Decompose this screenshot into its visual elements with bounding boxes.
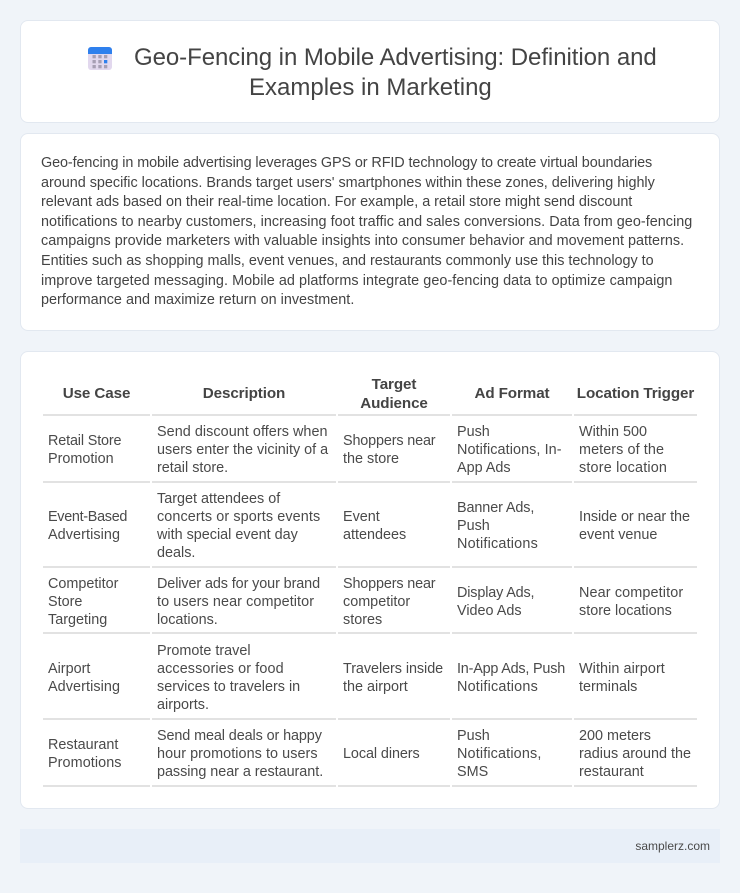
table: use cases: stores xyxy=(343,612,382,628)
row: Restaurant Promotions xyxy=(48,737,122,771)
table: use cases: users enter the vicinity of a xyxy=(157,442,328,458)
panel: table card xyxy=(20,351,720,809)
table: use cases: retail store. xyxy=(157,460,228,476)
header: Target Audience xyxy=(360,376,428,412)
intro text block: Geo-fencing in mobile advertising leverages GPS or RFID technology to create virtual boundaries xyxy=(41,155,652,171)
row: Competitor Store Targeting: Competitor xyxy=(48,576,118,592)
table: use cases xyxy=(43,376,697,787)
table: use cases: Shoppers near xyxy=(343,433,435,449)
table: use cases: Within airport xyxy=(579,661,665,677)
header: Use Case: Use Case xyxy=(63,385,130,402)
icon: calendar xyxy=(88,47,112,70)
table: use cases: event venue xyxy=(579,527,657,543)
table: use cases: hour promotions to users xyxy=(157,746,318,762)
table: use cases: App Ads xyxy=(457,460,511,476)
table: use cases: Display Ads, xyxy=(457,585,534,601)
table: use cases: to users near competitor xyxy=(157,594,314,610)
table: use cases: services to travelers in xyxy=(157,679,300,695)
row: Restaurant Promotions: Restaurant xyxy=(48,737,118,753)
table: use cases: store location xyxy=(579,460,667,476)
table: use cases: Near competitor xyxy=(579,585,683,601)
row: Airport Advertising xyxy=(48,661,120,695)
table: use cases: Deliver ads for your brand xyxy=(157,576,320,592)
intro text block: improve targeted messaging. Mobile ad platforms integrate geo-fencing data to optimize campaign xyxy=(41,273,672,289)
intro text block: relevant ads based on their real-time location. For example, a retail store might send discount xyxy=(41,194,632,210)
panel: title card xyxy=(20,20,720,123)
header: Target Audience: Target xyxy=(372,376,416,393)
table: use cases: restaurant xyxy=(579,764,644,780)
row: Competitor Store Targeting xyxy=(48,576,118,628)
row: Airport Advertising: Advertising xyxy=(48,679,120,695)
header: Target Audience: Audience xyxy=(360,395,428,412)
table: use cases: attendees xyxy=(343,527,406,543)
row: Restaurant Promotions: Promotions xyxy=(48,755,122,771)
table: use cases: Promote travel xyxy=(157,643,251,659)
table: use cases: 200 meters xyxy=(579,728,651,744)
header: Description: Description xyxy=(203,385,285,402)
table: use cases: Target attendees of xyxy=(157,491,280,507)
table: use cases: concerts or sports events xyxy=(157,509,320,525)
table: use cases: meters of the xyxy=(579,442,664,458)
intro text block: campaigns provide marketers with valuable insights into consumer behavior and movement patterns. xyxy=(41,233,684,249)
panel: intro card xyxy=(20,133,720,331)
table: use cases: Video Ads xyxy=(457,603,522,619)
table: use cases: with special event day xyxy=(157,527,298,543)
table: use cases: Event xyxy=(343,509,380,525)
title: Examples in Marketing xyxy=(249,74,492,101)
table: use cases: Notifications xyxy=(457,679,538,695)
table: use cases: Within 500 xyxy=(579,424,647,440)
intro text block xyxy=(41,155,692,308)
table: use cases: store locations xyxy=(579,603,672,619)
row: Retail Store Promotion: Retail Store xyxy=(48,433,121,449)
table: use cases: accessories or food xyxy=(157,661,284,677)
row: Event-Based Advertising: Event-Based xyxy=(48,509,127,525)
intro text block: notifications to nearby customers, increasing foot traffic and sales conversions. Data from geo-fencing xyxy=(41,214,692,230)
title: Geo-Fencing in Mobile Advertising: Definition and xyxy=(134,44,657,71)
table: use cases: Banner Ads, xyxy=(457,500,534,516)
title xyxy=(134,44,657,101)
intro text block: performance and maximize return on investment. xyxy=(41,292,354,308)
table: use cases: In-App Ads, Push xyxy=(457,661,565,677)
table: use cases: Notifications xyxy=(457,536,538,552)
header: Location Trigger: Location Trigger xyxy=(577,385,694,402)
table: use cases: deals. xyxy=(157,545,195,561)
row: Competitor Store Targeting: Targeting xyxy=(48,612,107,628)
intro text block: around specific locations. Brands target users' smartphones within these zones, delivering highly xyxy=(41,175,655,191)
table: use cases: Send meal deals or happy xyxy=(157,728,322,744)
table: use cases: Push xyxy=(457,518,490,534)
row: Competitor Store Targeting: Store xyxy=(48,594,82,610)
header: Ad Format: Ad Format xyxy=(474,385,550,402)
table: use cases: Inside or near the xyxy=(579,509,690,525)
table: use cases: SMS xyxy=(457,764,488,780)
footer bar xyxy=(20,829,720,863)
table: use cases: the airport xyxy=(343,679,408,695)
row: Airport Advertising: Airport xyxy=(48,661,90,677)
table: use cases: Push xyxy=(457,424,490,440)
table: use cases: passing near a restaurant. xyxy=(157,764,323,780)
table: use cases: Shoppers near xyxy=(343,576,435,592)
table: use cases: competitor xyxy=(343,594,410,610)
table: use cases: locations. xyxy=(157,612,218,628)
table: use cases: airports. xyxy=(157,697,209,713)
table: use cases: Send discount offers when xyxy=(157,424,328,440)
table: use cases: Push xyxy=(457,728,490,744)
table: use cases: Notifications, In- xyxy=(457,442,562,458)
row: Event-Based Advertising xyxy=(48,509,127,543)
table: use cases: Local diners xyxy=(343,746,420,762)
row: Retail Store Promotion: Promotion xyxy=(48,451,114,467)
intro text block: Entities such as shopping malls, event venues, and restaurants commonly use this technology to xyxy=(41,253,654,269)
table: use cases: Notifications, xyxy=(457,746,541,762)
table: use cases: the store xyxy=(343,451,399,467)
row: Event-Based Advertising: Advertising xyxy=(48,527,120,543)
table: use cases: radius around the xyxy=(579,746,691,762)
row: Retail Store Promotion xyxy=(48,433,121,467)
table: use cases: terminals xyxy=(579,679,637,695)
footer text: samplerz.com xyxy=(635,839,710,853)
table: use cases: Travelers inside xyxy=(343,661,443,677)
